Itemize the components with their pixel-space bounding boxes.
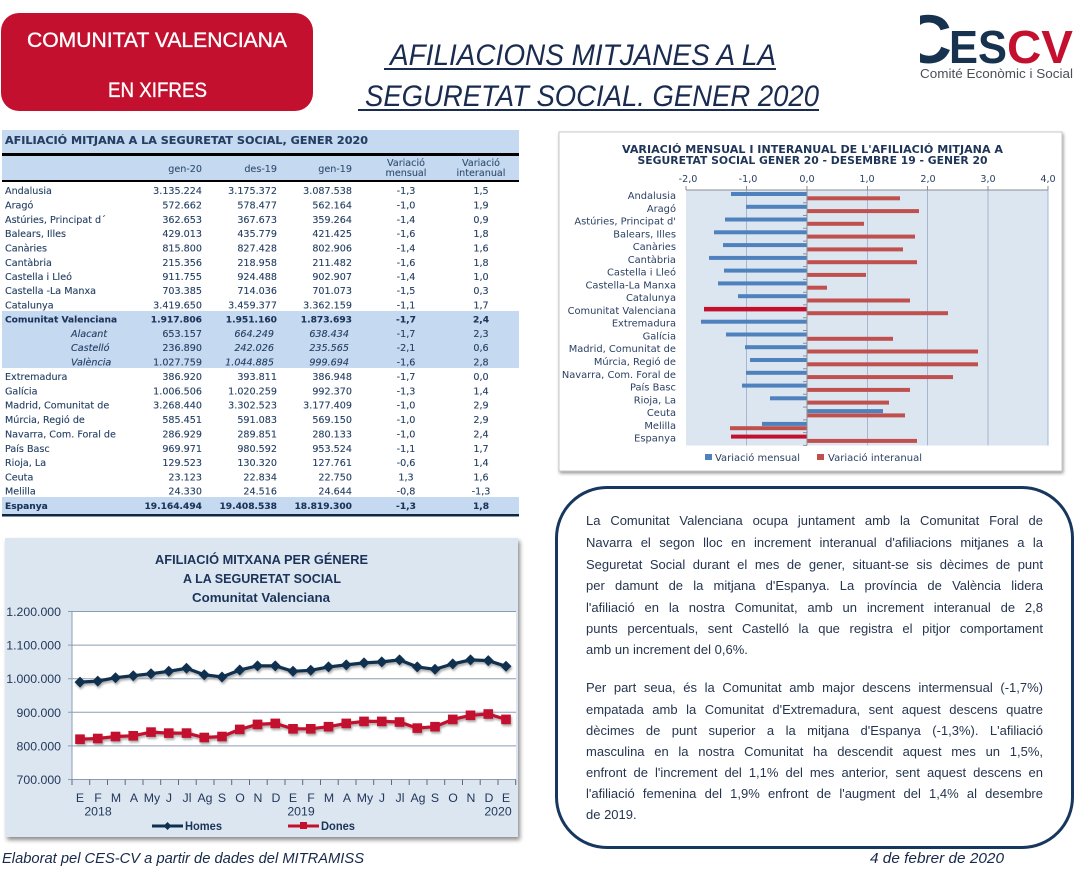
x axis month labels: O xyxy=(235,791,245,805)
row: Navarra: Navarra, Com. Foral de xyxy=(5,430,116,440)
row: Navarra xyxy=(5,430,489,440)
row: Castelló: -2,1 xyxy=(397,343,415,354)
y axis labels xyxy=(6,605,61,787)
text: empatada amb la Comunitat d'Extremadura, sent aquest descens quatre xyxy=(586,702,1043,717)
row: Castella i Lleó: 902.907 xyxy=(312,272,352,283)
x axis month labels: F xyxy=(307,791,315,805)
row: Múrcia: 585.451 xyxy=(162,415,202,426)
line chart legend: Dones xyxy=(321,819,355,833)
row: Castella i Lleó: Castella i Lleó xyxy=(5,271,72,283)
header badge: Comunitat Valenciana en xifres xyxy=(1,13,313,111)
category labels: Canàries xyxy=(633,241,676,253)
x axis month labels: J xyxy=(166,791,172,805)
row: Ceuta: 1,6 xyxy=(473,472,489,484)
row: Galícia xyxy=(5,386,489,398)
y axis labels: 1.100.000 xyxy=(6,638,61,652)
row: València: 999.694 xyxy=(309,358,349,368)
row: Cantàbria: 215.356 xyxy=(162,258,202,269)
row: Comunitat Valenciana: 2,4 xyxy=(473,316,489,326)
row: Castella i Lleó xyxy=(5,271,489,283)
text: l'afiliació en la nostra Comunitat, amb un increment interanual de 2,8 xyxy=(586,600,1043,615)
category labels: Catalunya xyxy=(626,293,676,304)
row: Castella i Lleó: 924.488 xyxy=(237,272,277,283)
row: Astúries: Astúries, Principat d´ xyxy=(5,214,106,226)
line chart: afiliació per gènere xyxy=(5,538,518,837)
row: Cantàbria: 211.482 xyxy=(312,258,352,269)
row: València: València xyxy=(71,356,111,368)
row: Catalunya: 3.362.159 xyxy=(303,300,352,312)
x axis year labels: 2020 xyxy=(484,804,512,818)
series: Homes xyxy=(80,660,506,682)
row: Extremadura: -1,7 xyxy=(397,372,415,383)
row: Galícia: 992.370 xyxy=(312,386,352,398)
row: Extremadura: Extremadura xyxy=(5,372,67,383)
row: Ceuta: 1,3 xyxy=(398,472,414,484)
row: Castelló: 0,6 xyxy=(473,343,489,354)
x axis month labels: M xyxy=(324,791,334,805)
row: Cantàbria xyxy=(5,257,489,269)
row: Catalunya: 3.459.377 xyxy=(228,300,277,312)
table column headers: Variació xyxy=(462,157,500,169)
row: Extremadura: 386.948 xyxy=(312,372,352,383)
row: Navarra: 286.929 xyxy=(162,430,202,440)
x axis month labels: Jl xyxy=(183,791,191,805)
row: Balears: Balears, Illes xyxy=(5,229,66,240)
row: Múrcia: 2,9 xyxy=(473,415,489,426)
row: Madrid: 3.177.409 xyxy=(303,400,352,412)
row: València: -1,6 xyxy=(397,358,415,368)
row: Extremadura xyxy=(5,372,489,383)
row: València: 2,8 xyxy=(473,358,489,368)
row: Galícia: 1.006.506 xyxy=(153,386,202,398)
chart title xyxy=(622,143,1003,167)
footer: date: 4 de febrer de 2020 xyxy=(870,850,1005,867)
row: Andalusia: 3.175.372 xyxy=(228,186,277,197)
x axis year labels: 2018 xyxy=(84,804,112,818)
row: Balears: 1,8 xyxy=(473,229,489,240)
row: Espanya: 1,8 xyxy=(473,502,489,512)
category labels: Andalusia xyxy=(628,191,676,202)
row: Aragó: -1,0 xyxy=(397,200,415,212)
text panel frame xyxy=(555,486,1074,849)
text: La Comunitat Valenciana ocupa juntament amb la Comunitat Foral de xyxy=(586,513,1043,528)
line chart title: AFILIACIÓ MITXANA PER GÉNERE xyxy=(155,552,368,567)
row: Alacant: Alacant xyxy=(70,329,108,340)
row: Madrid: 3.302.523 xyxy=(228,400,277,412)
category labels: Espanya xyxy=(634,434,676,445)
row: Castelló: Castelló xyxy=(71,342,110,354)
row: Castella-La Manxa: -1,5 xyxy=(397,286,415,297)
x axis month labels: Ag xyxy=(410,791,426,805)
row: Espanya: 18.819.300 xyxy=(294,502,352,512)
row: Canàries: 827.428 xyxy=(237,244,277,254)
row: Castella-La Manxa: 701.073 xyxy=(312,286,352,297)
x axis month labels xyxy=(76,791,510,805)
row: Catalunya: -1,1 xyxy=(397,300,415,312)
series: Dones xyxy=(80,714,506,739)
x axis month labels: A xyxy=(343,791,352,805)
row: Andalusia: 3.087.538 xyxy=(303,186,352,197)
row: Comunitat Valenciana: 1.873.693 xyxy=(301,316,352,326)
row: País Basc xyxy=(5,443,489,455)
row: Múrcia: Múrcia, Regió de xyxy=(5,414,85,426)
value axis labels: 3,0 xyxy=(980,174,996,185)
x axis month labels: M xyxy=(111,791,121,805)
text: amb un increment del 0,6%. xyxy=(586,642,748,657)
row: Rioja: -0,6 xyxy=(397,458,415,469)
row: Astúries: 359.264 xyxy=(312,215,352,226)
logo: CES CV: Comité Econòmic i Social xyxy=(920,66,1073,81)
value axis labels: 4,0 xyxy=(1040,174,1056,185)
text: Per part seua, és la Comunitat amb major descens intermensual (-1,7%) xyxy=(586,680,1043,695)
y axis labels: 700.000 xyxy=(17,773,61,787)
row: Ceuta: 22.834 xyxy=(243,472,277,484)
value axis labels: -2,0 xyxy=(679,174,697,185)
row: Espanya: Espanya xyxy=(5,502,48,512)
chart legend: Variació interanual xyxy=(828,452,922,464)
row: Cantàbria: 1,8 xyxy=(473,258,489,269)
value axis labels: 2,0 xyxy=(920,174,936,185)
row: País Basc: País Basc xyxy=(5,443,50,455)
category labels: Astúries, Principat d' xyxy=(574,216,676,228)
row: Madrid: -1,0 xyxy=(397,400,415,412)
value axis labels xyxy=(679,174,1056,185)
row: Rioja: 127.761 xyxy=(312,458,352,469)
x axis month labels: F xyxy=(94,791,102,805)
category labels: Castella-La Manxa xyxy=(585,280,676,291)
x axis month labels: E xyxy=(76,791,84,805)
row: Alacant xyxy=(70,329,489,340)
row: Galícia: -1,3 xyxy=(397,386,415,398)
text: Navarra el segon lloc en increment interanual d'afiliacions mitjanes a la xyxy=(586,535,1043,550)
x axis month labels: A xyxy=(130,791,139,805)
row: Rioja: 129.523 xyxy=(162,458,202,469)
category labels xyxy=(562,191,676,445)
category labels: Balears, Illes xyxy=(613,229,676,240)
row: Melilla: 24.516 xyxy=(243,486,277,498)
chart title: VARIACIÓ MENSUAL I INTERANUAL DE L'AFILIACIÓ MITJANA A xyxy=(622,143,1003,156)
line chart title xyxy=(155,552,368,605)
table title: AFILIACIÓ MITJANA A LA SEGURETAT SOCIAL, GENER 2020 xyxy=(5,134,368,147)
row: Andalusia xyxy=(5,186,489,197)
row: Madrid: 2,9 xyxy=(473,400,489,412)
row: Balears: 435.779 xyxy=(237,229,277,240)
row: Catalunya: Catalunya xyxy=(5,300,54,312)
row: Balears: -1,6 xyxy=(397,229,415,240)
x axis month labels: S xyxy=(431,791,439,805)
chart title: SEGURETAT SOCIAL GENER 20 - DESEMBRE 19 - GENER 20 xyxy=(638,155,988,167)
chart legend xyxy=(705,452,922,464)
row: Espanya: 19.164.494 xyxy=(144,502,202,512)
row: Rioja: Rioja, La xyxy=(5,458,46,469)
row: Balears: 429.013 xyxy=(162,229,202,240)
row: Alacant: 2,3 xyxy=(473,329,489,340)
row: Andalusia: 1,5 xyxy=(473,186,489,197)
line chart legend xyxy=(152,819,355,833)
row: Alacant: 638.434 xyxy=(309,329,349,340)
line chart title: A LA SEGURETAT SOCIAL xyxy=(183,572,341,586)
row: Catalunya: 3.419.650 xyxy=(153,300,202,312)
series: variació interanual xyxy=(730,196,978,443)
x axis month labels: J xyxy=(379,791,385,805)
row: Castella-La Manxa: 714.036 xyxy=(237,286,277,297)
x axis month labels: S xyxy=(218,791,226,805)
category labels: Navarra, Com. Foral de xyxy=(562,370,676,381)
category labels: Madrid, Comunitat de xyxy=(569,344,676,355)
row: Castelló: 235.565 xyxy=(309,343,349,354)
row: Aragó: Aragó xyxy=(5,200,33,212)
row: Alacant: -1,7 xyxy=(397,329,415,340)
row: Navarra: -1,0 xyxy=(397,430,415,440)
category labels: País Basc xyxy=(630,382,676,394)
row: Extremadura: 0,0 xyxy=(473,372,489,383)
row: Astúries: 362.653 xyxy=(162,215,202,226)
row: Ceuta: 22.750 xyxy=(318,472,352,484)
row: Espanya xyxy=(5,502,489,512)
row: Ceuta: 23.123 xyxy=(168,472,202,484)
row: Andalusia: 3.135.224 xyxy=(153,186,202,197)
text: per damunt de la mitjana d'Espanya. La província de València lidera xyxy=(586,578,1043,593)
y axis labels: 1.200.000 xyxy=(6,605,61,619)
row: Canàries: Canàries xyxy=(5,242,47,254)
row: València: 1.027.759 xyxy=(153,358,202,368)
row: Canàries xyxy=(5,242,489,254)
row: Múrcia xyxy=(5,414,489,426)
row: Catalunya xyxy=(5,300,489,312)
row: Canàries: 802.906 xyxy=(312,244,352,254)
row: País Basc: 969.971 xyxy=(162,444,202,455)
main title xyxy=(358,39,820,113)
row: Espanya: 19.408.538 xyxy=(219,502,277,512)
row: Canàries: -1,4 xyxy=(397,244,415,254)
category labels: Comunitat Valenciana xyxy=(568,306,676,317)
y axis labels: 900.000 xyxy=(17,706,61,720)
row: País Basc: 980.592 xyxy=(237,444,277,455)
row: Extremadura: 393.811 xyxy=(237,372,277,383)
row: Castelló: 236.890 xyxy=(162,343,202,354)
row: Canàries: 815.800 xyxy=(162,244,202,254)
x axis month labels: N xyxy=(467,791,475,805)
row: Melilla: 24.644 xyxy=(318,486,352,498)
row: Castella-La Manxa: 0,3 xyxy=(473,286,489,297)
row: Rioja: 130.320 xyxy=(237,458,277,469)
row: Catalunya: 1,7 xyxy=(473,300,489,312)
table: afiliació mitjana xyxy=(2,130,519,516)
row: País Basc: 953.524 xyxy=(312,444,352,455)
row: Astúries: 0,9 xyxy=(473,215,489,226)
row: Andalusia: -1,3 xyxy=(397,186,415,197)
row: Navarra: 280.133 xyxy=(312,430,352,440)
x axis month labels: My xyxy=(357,791,374,805)
row: Comunitat Valenciana: -1,7 xyxy=(396,316,416,326)
logo: CES CV: C xyxy=(902,1,952,78)
row: València: 1.044.885 xyxy=(225,358,274,368)
text: masculina en la nostra Comunitat ha descendit aquest mes un 1,5%, xyxy=(586,744,1043,759)
row: Castella i Lleó: 1,0 xyxy=(473,272,489,283)
row: Múrcia: 591.083 xyxy=(237,415,277,426)
category labels: Aragó xyxy=(647,203,676,215)
category labels: Cantàbria xyxy=(628,254,676,266)
x axis year labels: 2019 xyxy=(287,804,315,818)
row: Rioja xyxy=(5,458,489,469)
category labels: Melilla xyxy=(644,421,676,432)
category labels: Ceuta xyxy=(647,408,676,419)
header badge: Comunitat Valenciana en xifres: COMUNITAT VALENCIANA xyxy=(27,29,287,52)
table column headers xyxy=(168,157,505,179)
row: País Basc: 1,7 xyxy=(473,444,489,455)
x axis month labels: E xyxy=(289,791,297,805)
text: de 2019. xyxy=(586,807,637,822)
text: punts percentuals, sent Castelló la que registra el pitjor comportament xyxy=(586,621,1043,636)
logo: CES CV: CV xyxy=(1007,21,1073,73)
row: Galícia: 1.020.259 xyxy=(228,386,277,398)
logo: CES CV: ES xyxy=(949,21,1007,73)
footer: source: Elaborat pel CES-CV a partir de dades del MITRAMISS xyxy=(2,850,364,867)
row: Melilla: -0,8 xyxy=(397,486,415,498)
category labels: Extremadura xyxy=(612,319,676,330)
x axis year labels xyxy=(84,804,512,818)
row: Cantàbria: Cantàbria xyxy=(5,257,52,269)
main title: SEGURETAT SOCIAL. GENER 2020 xyxy=(365,80,820,113)
category labels: Galícia xyxy=(643,330,676,342)
row: Espanya: -1,3 xyxy=(396,502,416,512)
table column headers: gen-19 xyxy=(318,164,352,175)
row: Aragó: 578.477 xyxy=(237,200,277,212)
row: Aragó: 572.662 xyxy=(162,200,202,212)
row: Aragó: 562.164 xyxy=(312,200,352,212)
row: Comunitat Valenciana xyxy=(5,316,489,326)
row: Melilla xyxy=(5,486,490,498)
row: Balears xyxy=(5,229,489,240)
table column headers: mensual xyxy=(386,168,426,179)
x axis month labels: E xyxy=(502,791,510,805)
row: Ceuta: Ceuta xyxy=(5,472,33,484)
category labels: Castella i Lleó xyxy=(607,267,676,279)
table column headers: Variació xyxy=(387,157,425,169)
row: Navarra: 289.851 xyxy=(237,430,277,440)
row: Castella i Lleó: -1,4 xyxy=(397,272,415,283)
y axis labels: 1.000.000 xyxy=(6,672,61,686)
row: Astúries: -1,4 xyxy=(397,215,415,226)
x axis month labels: D xyxy=(272,791,281,805)
row: Madrid: Madrid, Comunitat de xyxy=(5,400,109,412)
row: Castella-La Manxa: Castella -La Manxa xyxy=(5,286,96,297)
table column headers: gen-20 xyxy=(168,164,202,175)
row: Cantàbria: -1,6 xyxy=(397,258,415,269)
series: variació mensual xyxy=(701,192,883,439)
row: Comunitat Valenciana: Comunitat Valenciana xyxy=(5,316,117,326)
row: Alacant: 664.249 xyxy=(234,329,274,340)
line chart legend: Homes xyxy=(185,819,222,833)
row: Ceuta xyxy=(5,472,489,484)
header badge: Comunitat Valenciana en xifres: EN XIFRES xyxy=(108,79,207,102)
x axis month labels: N xyxy=(254,791,262,805)
text: Seguretat Social durant el mes de gener, situant-se sis dècimes de punt xyxy=(586,557,1043,572)
row: Aragó: 1,9 xyxy=(473,200,489,212)
row: Comunitat Valenciana: 1.951.160 xyxy=(226,316,277,326)
category labels: Múrcia, Regió de xyxy=(594,356,676,368)
text: l'afiliació femenina del 1,9% enfront de l'augment del 1,4% al desembre xyxy=(586,786,1043,801)
row: País Basc: -1,1 xyxy=(397,444,415,455)
y axis labels: 800.000 xyxy=(17,740,61,754)
row: Navarra: 2,4 xyxy=(473,430,489,440)
row: Galícia: Galícia xyxy=(5,386,37,398)
row: Rioja: 1,4 xyxy=(473,458,489,469)
row: Comunitat Valenciana: 1.917.806 xyxy=(151,316,202,326)
main title: AFILIACIONS MITJANES A LA xyxy=(388,39,776,72)
value axis labels: 0,0 xyxy=(799,174,815,185)
x axis month labels: O xyxy=(448,791,458,805)
row: Melilla: -1,3 xyxy=(472,486,490,498)
bar chart: variació mensual i interanual xyxy=(559,132,1062,471)
x axis month labels: Ag xyxy=(197,791,213,805)
x axis month labels: D xyxy=(485,791,494,805)
logo: CES CV xyxy=(920,14,1073,78)
row: Galícia: 1,4 xyxy=(473,386,489,398)
row: Balears: 421.425 xyxy=(312,229,352,240)
category labels: Rioja, La xyxy=(634,395,676,406)
row: Múrcia: -1,0 xyxy=(397,415,415,426)
row: Madrid: 3.268.440 xyxy=(153,400,202,412)
text block: commentary xyxy=(586,513,1043,822)
row: Castella i Lleó: 911.755 xyxy=(162,272,202,283)
chart legend: Variació mensual xyxy=(715,452,800,464)
row: Aragó xyxy=(5,200,489,212)
row: Madrid xyxy=(5,400,489,412)
row: Castelló: 242.026 xyxy=(234,343,274,354)
row: Canàries: 1,6 xyxy=(473,244,489,254)
text: dècimes de punt superior a la mitjana d'Espanya (-1,3%). L'afiliació xyxy=(586,723,1043,738)
row: Astúries xyxy=(5,214,489,226)
row: Andalusia: Andalusia xyxy=(5,186,52,197)
row: Melilla: 24.330 xyxy=(168,486,202,498)
row: Astúries: 367.673 xyxy=(237,215,277,226)
row: Alacant: 653.157 xyxy=(162,329,202,340)
row: València xyxy=(71,356,489,368)
value axis labels: 1,0 xyxy=(859,174,875,185)
row: Múrcia: 569.150 xyxy=(312,415,352,426)
row: Extremadura: 386.920 xyxy=(162,372,202,383)
row: Cantàbria: 218.958 xyxy=(237,258,277,269)
table column headers: des-19 xyxy=(244,164,277,175)
row: Castella-La Manxa xyxy=(5,286,489,297)
value axis labels: -1,0 xyxy=(739,174,757,185)
row: Castella-La Manxa: 703.385 xyxy=(162,286,202,297)
table column headers: interanual xyxy=(457,168,505,179)
row: Melilla: Melilla xyxy=(5,486,36,498)
row: Castelló xyxy=(71,342,489,354)
x axis month labels: My xyxy=(144,791,161,805)
text: enfront de l'increment del 1,1% del mes anterior, sent aquest descens en xyxy=(586,765,1043,780)
x axis month labels: Jl xyxy=(396,791,404,805)
line chart title: Comunitat Valenciana xyxy=(192,591,331,605)
